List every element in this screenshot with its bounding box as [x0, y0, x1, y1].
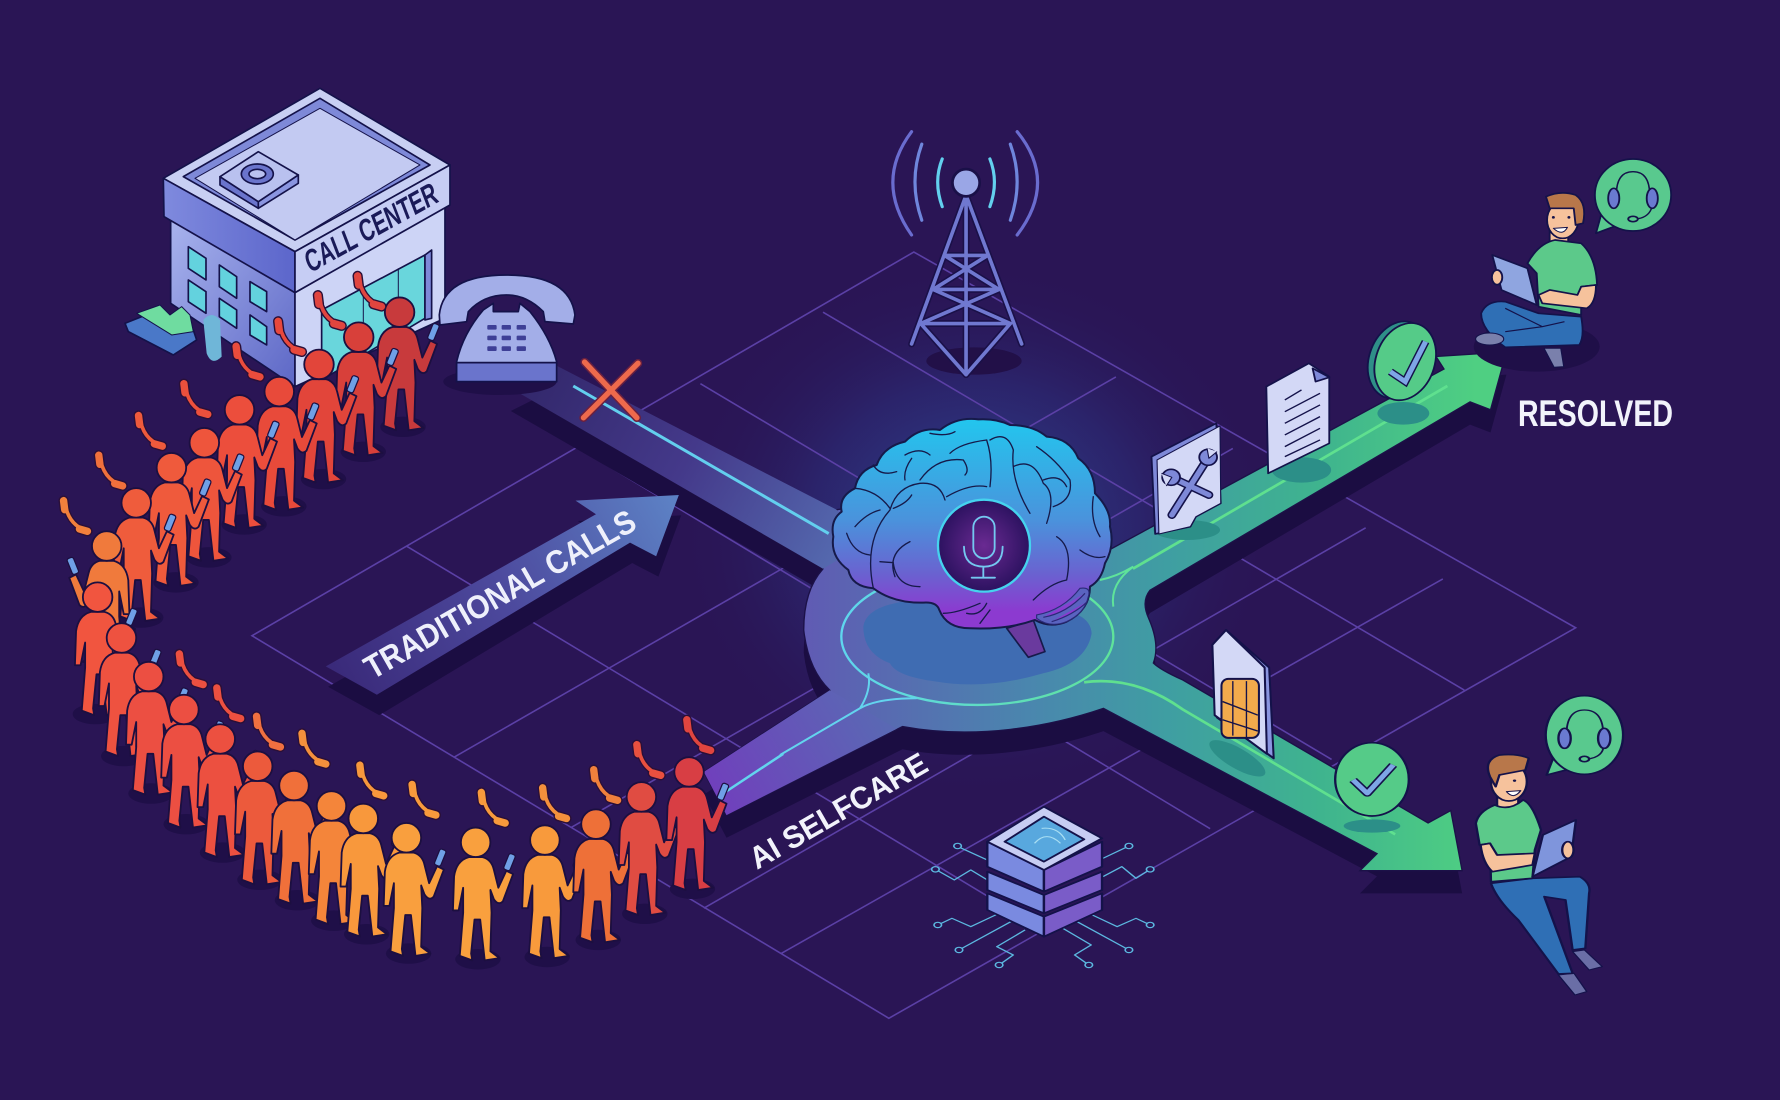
cell tower	[893, 132, 1038, 375]
tower shadow	[926, 347, 1022, 375]
arrow shadow	[328, 515, 681, 715]
call center sign: CALL CENTER	[300, 175, 442, 280]
side pad	[125, 305, 222, 361]
left wall	[171, 217, 295, 387]
upper-right road light line	[1133, 386, 1447, 569]
road network	[511, 352, 1506, 893]
front wall	[295, 207, 445, 387]
signal waves	[893, 132, 1038, 235]
junction and arrows surface	[704, 352, 1506, 871]
server stack with circuits	[932, 807, 1154, 968]
top-left road from telephone	[511, 366, 863, 569]
microphone badge	[938, 500, 1030, 592]
tools card icon	[1151, 423, 1221, 540]
ring line	[841, 568, 1113, 705]
roof unit	[220, 152, 298, 208]
queue of callers	[64, 276, 729, 969]
resolved label: RESOLVED	[1518, 393, 1673, 434]
left fascia	[163, 178, 295, 293]
red cross on traditional road	[583, 362, 638, 418]
lower path icons and person	[932, 696, 1623, 995]
roof parapet inner	[183, 98, 430, 240]
waiting people	[67, 297, 729, 960]
ring branches	[780, 673, 917, 755]
glass storefront	[322, 250, 432, 380]
arrow label: TRADITIONAL CALLS	[357, 502, 642, 686]
traditional calls arrow	[326, 495, 681, 715]
windows	[188, 247, 267, 345]
roof top	[163, 88, 450, 252]
SIM card icon	[1205, 630, 1274, 783]
phone body	[457, 303, 557, 382]
seated person	[1474, 193, 1600, 372]
document icon	[1266, 363, 1331, 483]
telephone icon	[439, 275, 575, 395]
AI selfcare road light line	[727, 754, 783, 791]
ringing handsets	[64, 276, 711, 823]
cerebellum	[1037, 588, 1089, 624]
phone handset	[439, 275, 575, 325]
support bubble icon	[1595, 159, 1671, 233]
queue feet shadows	[73, 417, 715, 969]
keypad	[487, 325, 526, 351]
support bubble lower	[1546, 696, 1623, 775]
brain stem	[1007, 620, 1045, 657]
arrow body	[326, 495, 679, 695]
sign fascia	[295, 165, 450, 293]
phone base	[457, 363, 557, 382]
centre glow	[675, 260, 1275, 800]
top-left road light line	[573, 386, 829, 534]
lower-right road light line	[1084, 681, 1395, 834]
roof deck	[195, 108, 420, 240]
check badge icon	[1359, 315, 1445, 425]
tower lattice colour	[912, 195, 1022, 375]
upper path icons and person	[1151, 159, 1671, 540]
isometric floor grid	[252, 252, 1576, 1018]
antenna ball	[952, 169, 980, 196]
phone shadow	[443, 368, 557, 395]
AI selfcare label: AI SELFCARE	[743, 746, 934, 876]
check badge lower	[1335, 743, 1409, 833]
road drop shadow	[511, 375, 1506, 893]
brain folds	[847, 432, 1105, 623]
tower lattice	[912, 195, 1022, 375]
right ring branches	[1100, 567, 1133, 607]
call center building	[125, 88, 450, 387]
brain outline	[833, 419, 1112, 629]
seated person lower	[1476, 755, 1602, 995]
ring shadow	[863, 600, 1092, 684]
AI selfcare road	[704, 690, 897, 815]
brain hub and junction ring	[780, 419, 1133, 755]
microphone icon	[964, 517, 1003, 578]
